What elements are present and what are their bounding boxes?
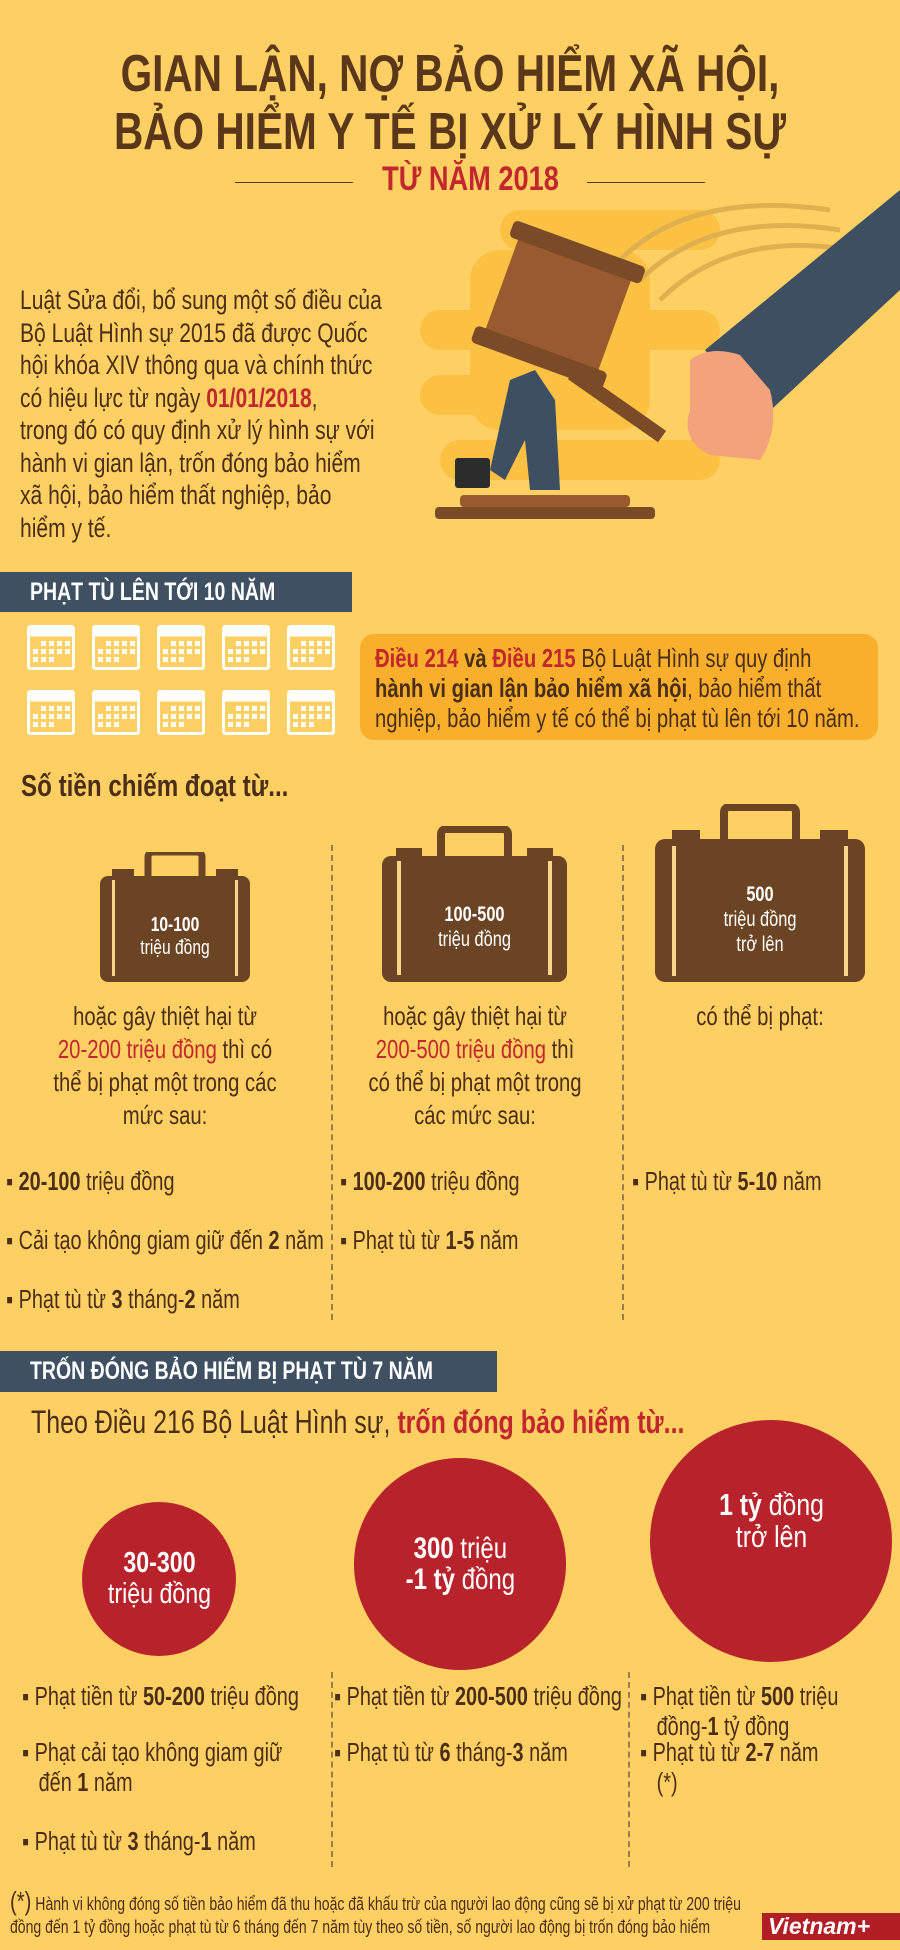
bullets col1: ▪ Phạt tù từ 3 tháng-2 năm bbox=[6, 1286, 240, 1314]
header: tron dong bao hiem bbox=[0, 1351, 497, 1392]
logo: vietnam+: Vietnam+ bbox=[768, 1913, 870, 1939]
text: col3 description: có thể bị phạt: bbox=[696, 1001, 824, 1031]
circle 1: triệu đồng bbox=[107, 1578, 211, 1610]
bullets: penalties col1: đến 1 năm bbox=[39, 1769, 133, 1797]
text: col1 description bbox=[53, 1001, 277, 1130]
intro text: Luật Sửa đổi, bổ sung một số điều của bbox=[20, 285, 382, 315]
bullets: penalties col3: ▪ Phạt tù từ 2-7 năm bbox=[640, 1739, 818, 1767]
callout: dieu 214 215: hành vi gian lận bảo hiểm xã hội, bảo hiểm thất bbox=[375, 673, 821, 703]
intro text bbox=[20, 285, 382, 542]
bullets: penalties col3: (*) bbox=[657, 1769, 678, 1797]
intro text: Bộ Luật Hình sự 2015 đã được Quốc bbox=[20, 318, 368, 348]
text: col2 description bbox=[368, 1001, 582, 1130]
bullets col1 bbox=[6, 1168, 324, 1314]
circle 3: 1 tỷ đồng bbox=[719, 1487, 823, 1522]
title: GIAN LẬN, NỢ BẢO HIỂM XÃ HỘI, bbox=[121, 45, 779, 103]
heading: so tien chiem doat: Số tiền chiếm đoạt từ... bbox=[21, 768, 288, 803]
intro text: hành vi gian lận, trốn đóng bảo hiểm bbox=[20, 448, 361, 478]
briefcase 2 bbox=[382, 826, 567, 982]
text: col2 description: các mức sau: bbox=[414, 1100, 536, 1130]
bullets: penalties col3 bbox=[640, 1683, 838, 1797]
title bbox=[114, 44, 786, 161]
briefcase 3: trở lên bbox=[736, 933, 784, 956]
text: col1 description: 20-200 triệu đồng thì có bbox=[58, 1034, 272, 1064]
intro text: hiểm y tế. bbox=[20, 512, 111, 542]
bullets col1: ▪ 20-100 triệu đồng bbox=[6, 1168, 175, 1196]
illustration: gavel and hand bbox=[420, 190, 900, 519]
bullets: penalties col1 bbox=[22, 1683, 299, 1856]
briefcase 2: 100-500 bbox=[444, 903, 505, 926]
bullets: penalties col1: ▪ Phạt cải tạo không giam giữ bbox=[22, 1739, 282, 1767]
subtitle: TỪ NĂM 2018 bbox=[382, 160, 558, 198]
bullets col3: ▪ Phạt tù từ 5-10 năm bbox=[632, 1168, 822, 1196]
circle 3 bbox=[650, 1420, 892, 1662]
bullets col1: ▪ Cải tạo không giam giữ đến 2 năm bbox=[6, 1227, 324, 1255]
icon: calendars bbox=[27, 625, 335, 735]
footnote bbox=[10, 1886, 741, 1937]
footnote: (*) Hành vi không đóng số tiền bảo hiểm đã thu hoặc đã khấu trừ của người lao động cũng sẽ bị xử phạt từ 200 triệu bbox=[10, 1886, 741, 1916]
bullets col2: ▪ 100-200 triệu đồng bbox=[340, 1168, 520, 1196]
text: col2 description: hoặc gây thiệt hại từ bbox=[383, 1001, 567, 1031]
briefcase 1: 10-100 bbox=[151, 914, 199, 936]
bullets: penalties col2: ▪ Phạt tù từ 6 tháng-3 năm bbox=[334, 1739, 568, 1767]
circle 1: 30-300 bbox=[123, 1547, 195, 1579]
text: col1 description: mức sau: bbox=[123, 1100, 207, 1130]
intro text: xã hội, bảo hiểm thất nghiệp, bảo bbox=[20, 480, 331, 510]
text: col1 description: thể bị phạt một trong các bbox=[53, 1067, 277, 1097]
intro text: có hiệu lực từ ngày 01/01/2018, bbox=[20, 382, 318, 412]
circle 1 bbox=[82, 1502, 236, 1656]
callout: dieu 214 215 bbox=[360, 634, 878, 740]
briefcase 1 bbox=[100, 852, 250, 982]
header: phat tu len toi 10 nam bbox=[0, 572, 352, 612]
circle 3: trở lên bbox=[735, 1519, 807, 1554]
bullets col2: ▪ Phạt tù từ 1-5 năm bbox=[340, 1227, 518, 1255]
circle 2: 300 triệu bbox=[413, 1532, 507, 1565]
text: col2 description: 200-500 triệu đồng thì bbox=[376, 1034, 574, 1064]
text: col1 description: hoặc gây thiệt hại từ bbox=[73, 1001, 257, 1031]
circle 2: -1 tỷ đồng bbox=[405, 1563, 515, 1596]
briefcase 3 bbox=[655, 804, 865, 982]
header: phat tu len toi 10 nam: PHẠT TÙ LÊN TỚI 10 NĂM bbox=[30, 578, 275, 606]
text: col2 description: có thể bị phạt một trong bbox=[368, 1067, 582, 1097]
bullets: penalties col1: ▪ Phạt tiền từ 50-200 triệu đồng bbox=[22, 1683, 299, 1711]
intro text: trong đó có quy định xử lý hình sự với bbox=[20, 415, 375, 445]
bullets: penalties col1: ▪ Phạt tù từ 3 tháng-1 năm bbox=[22, 1828, 256, 1856]
bullets: penalties col3: đồng-1 tỷ đồng bbox=[657, 1713, 789, 1741]
callout: dieu 214 215: Điều 214 và Điều 215 Bộ Luật Hình sự quy định bbox=[375, 643, 811, 673]
bullets: penalties col3: ▪ Phạt tiền từ 500 triệu bbox=[640, 1683, 838, 1711]
heading: theo dieu 216: Theo Điều 216 Bộ Luật Hình sự, trốn đóng bảo hiểm từ... bbox=[31, 1404, 684, 1440]
briefcase 1: triệu đồng bbox=[140, 937, 210, 959]
briefcase 3: triệu đồng bbox=[724, 908, 796, 931]
header: tron dong bao hiem: TRỐN ĐÓNG BẢO HIỂM BỊ PHẠT TÙ 7 NĂM bbox=[30, 1357, 433, 1385]
footnote: đồng đến 1 tỷ đồng hoặc phạt tù từ 6 tháng đến 7 năm tùy theo số tiền, số người lao động bị trốn đóng bảo hiểm bbox=[10, 1917, 710, 1937]
bullets col2 bbox=[340, 1168, 520, 1255]
bullets: penalties col2: ▪ Phạt tiền từ 200-500 triệu đồng bbox=[334, 1683, 622, 1711]
briefcase 3: 500 bbox=[746, 883, 774, 906]
title: BẢO HIỂM Y TẾ BỊ XỬ LÝ HÌNH SỰ bbox=[114, 103, 786, 161]
briefcase 2: triệu đồng bbox=[438, 928, 511, 951]
bullets: penalties col2 bbox=[334, 1683, 622, 1767]
circle 2 bbox=[354, 1458, 566, 1670]
intro text: hội khóa XIV thông qua và chính thức bbox=[20, 350, 372, 380]
callout: dieu 214 215: nghiệp, bảo hiểm y tế có thể bị phạt tù lên tới 10 năm. bbox=[375, 703, 860, 733]
